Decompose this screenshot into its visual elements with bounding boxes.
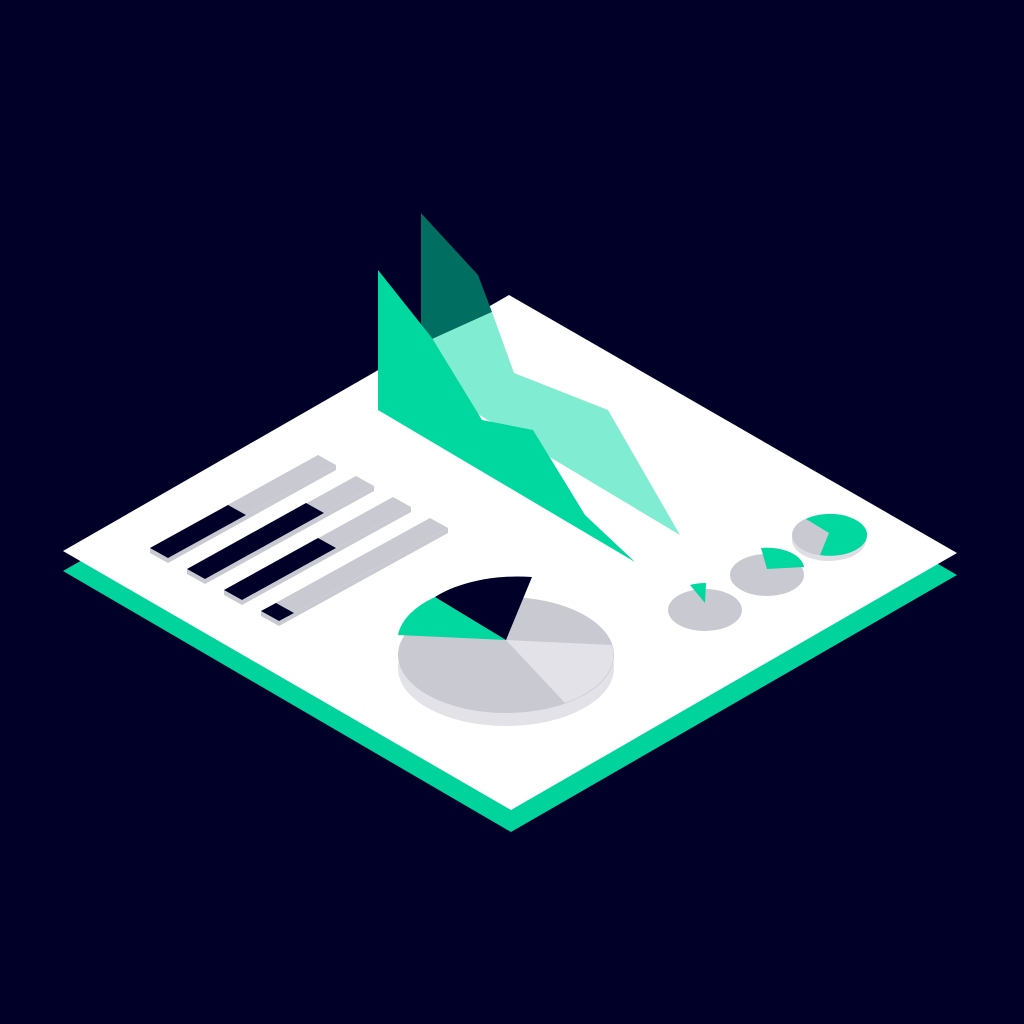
bar chart [150, 455, 448, 626]
platform base: green layer [63, 315, 957, 832]
pie chart: small 3 [792, 514, 867, 561]
area chart: front green layer [378, 270, 635, 562]
bar 4 [261, 518, 448, 626]
bar 1 [150, 455, 336, 563]
area chart: light translucent layer [421, 312, 680, 535]
platform: white sheet [63, 295, 957, 810]
pie chart: small 2 [730, 548, 804, 596]
bar 2 [187, 476, 374, 584]
area chart: back dark layer [421, 213, 492, 340]
pie chart: large [398, 576, 614, 726]
bar 3 [224, 497, 411, 605]
pie chart: small 1 [668, 583, 742, 631]
